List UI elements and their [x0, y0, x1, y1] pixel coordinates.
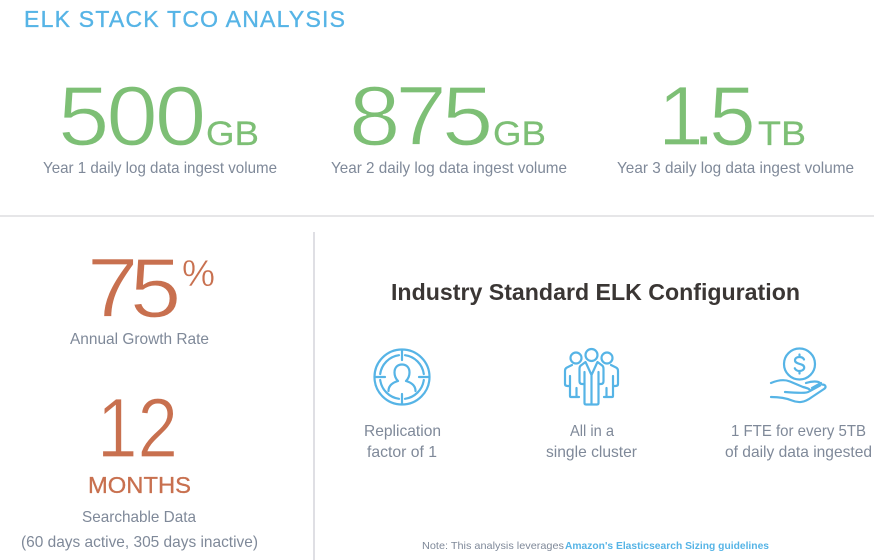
panel: yearly ingest volumes [43, 69, 854, 177]
caption: cluster [546, 423, 638, 461]
caption: fte [725, 423, 872, 461]
stat: year 3 [617, 69, 854, 177]
stat: searchable months: MONTHS [88, 472, 191, 498]
stat: year 2: Year 2 daily log data ingest volume [331, 160, 567, 177]
caption: fte: of daily data ingested [725, 444, 872, 461]
caption: replication: factor of 1 [367, 444, 437, 461]
stat: searchable months [21, 381, 258, 551]
icon: replication target [374, 350, 430, 404]
heading: Industry Standard ELK Configuration [391, 279, 800, 305]
title: ELK STACK TCO ANALYSIS [24, 6, 345, 32]
icon: hand holding coin [771, 348, 826, 402]
caption: fte: 1 FTE for every 5TB [731, 423, 866, 440]
caption: replication [364, 423, 441, 461]
stat: year 2 [331, 69, 567, 177]
stat: annual growth: 75 [87, 241, 181, 335]
stat: year 1: Year 1 daily log data ingest volume [43, 160, 277, 177]
panel: configuration [364, 279, 872, 552]
stat: year 3: 1.5 [658, 69, 756, 163]
stat: searchable months: 12 [97, 381, 178, 475]
caption: cluster: single cluster [546, 444, 638, 461]
stat: year 1: 500 [58, 69, 203, 163]
stat: annual growth: Annual Growth Rate [70, 331, 209, 348]
panel: growth and retention [21, 241, 258, 551]
caption: replication: Replication [364, 423, 441, 440]
stat: searchable months: Searchable Data [82, 509, 196, 526]
note: Note: This analysis leverages [422, 540, 564, 552]
icon: cluster of people [565, 349, 618, 404]
stat: annual growth: % [182, 253, 215, 294]
caption: cluster: All in a [570, 423, 614, 440]
stat: year 1: GB [206, 115, 259, 153]
stat: year 2: GB [493, 115, 546, 153]
stat: annual growth [70, 241, 215, 348]
stat: searchable months: (60 days active, 305 days inactive) [21, 534, 258, 551]
stat: year 3: Year 3 daily log data ingest volume [617, 160, 854, 177]
stat: year 1 [43, 69, 277, 177]
note: Amazon's Elasticsearch Sizing guidelines [565, 540, 769, 552]
stat: year 2: 875 [349, 69, 490, 163]
stat: year 3: TB [758, 115, 806, 153]
